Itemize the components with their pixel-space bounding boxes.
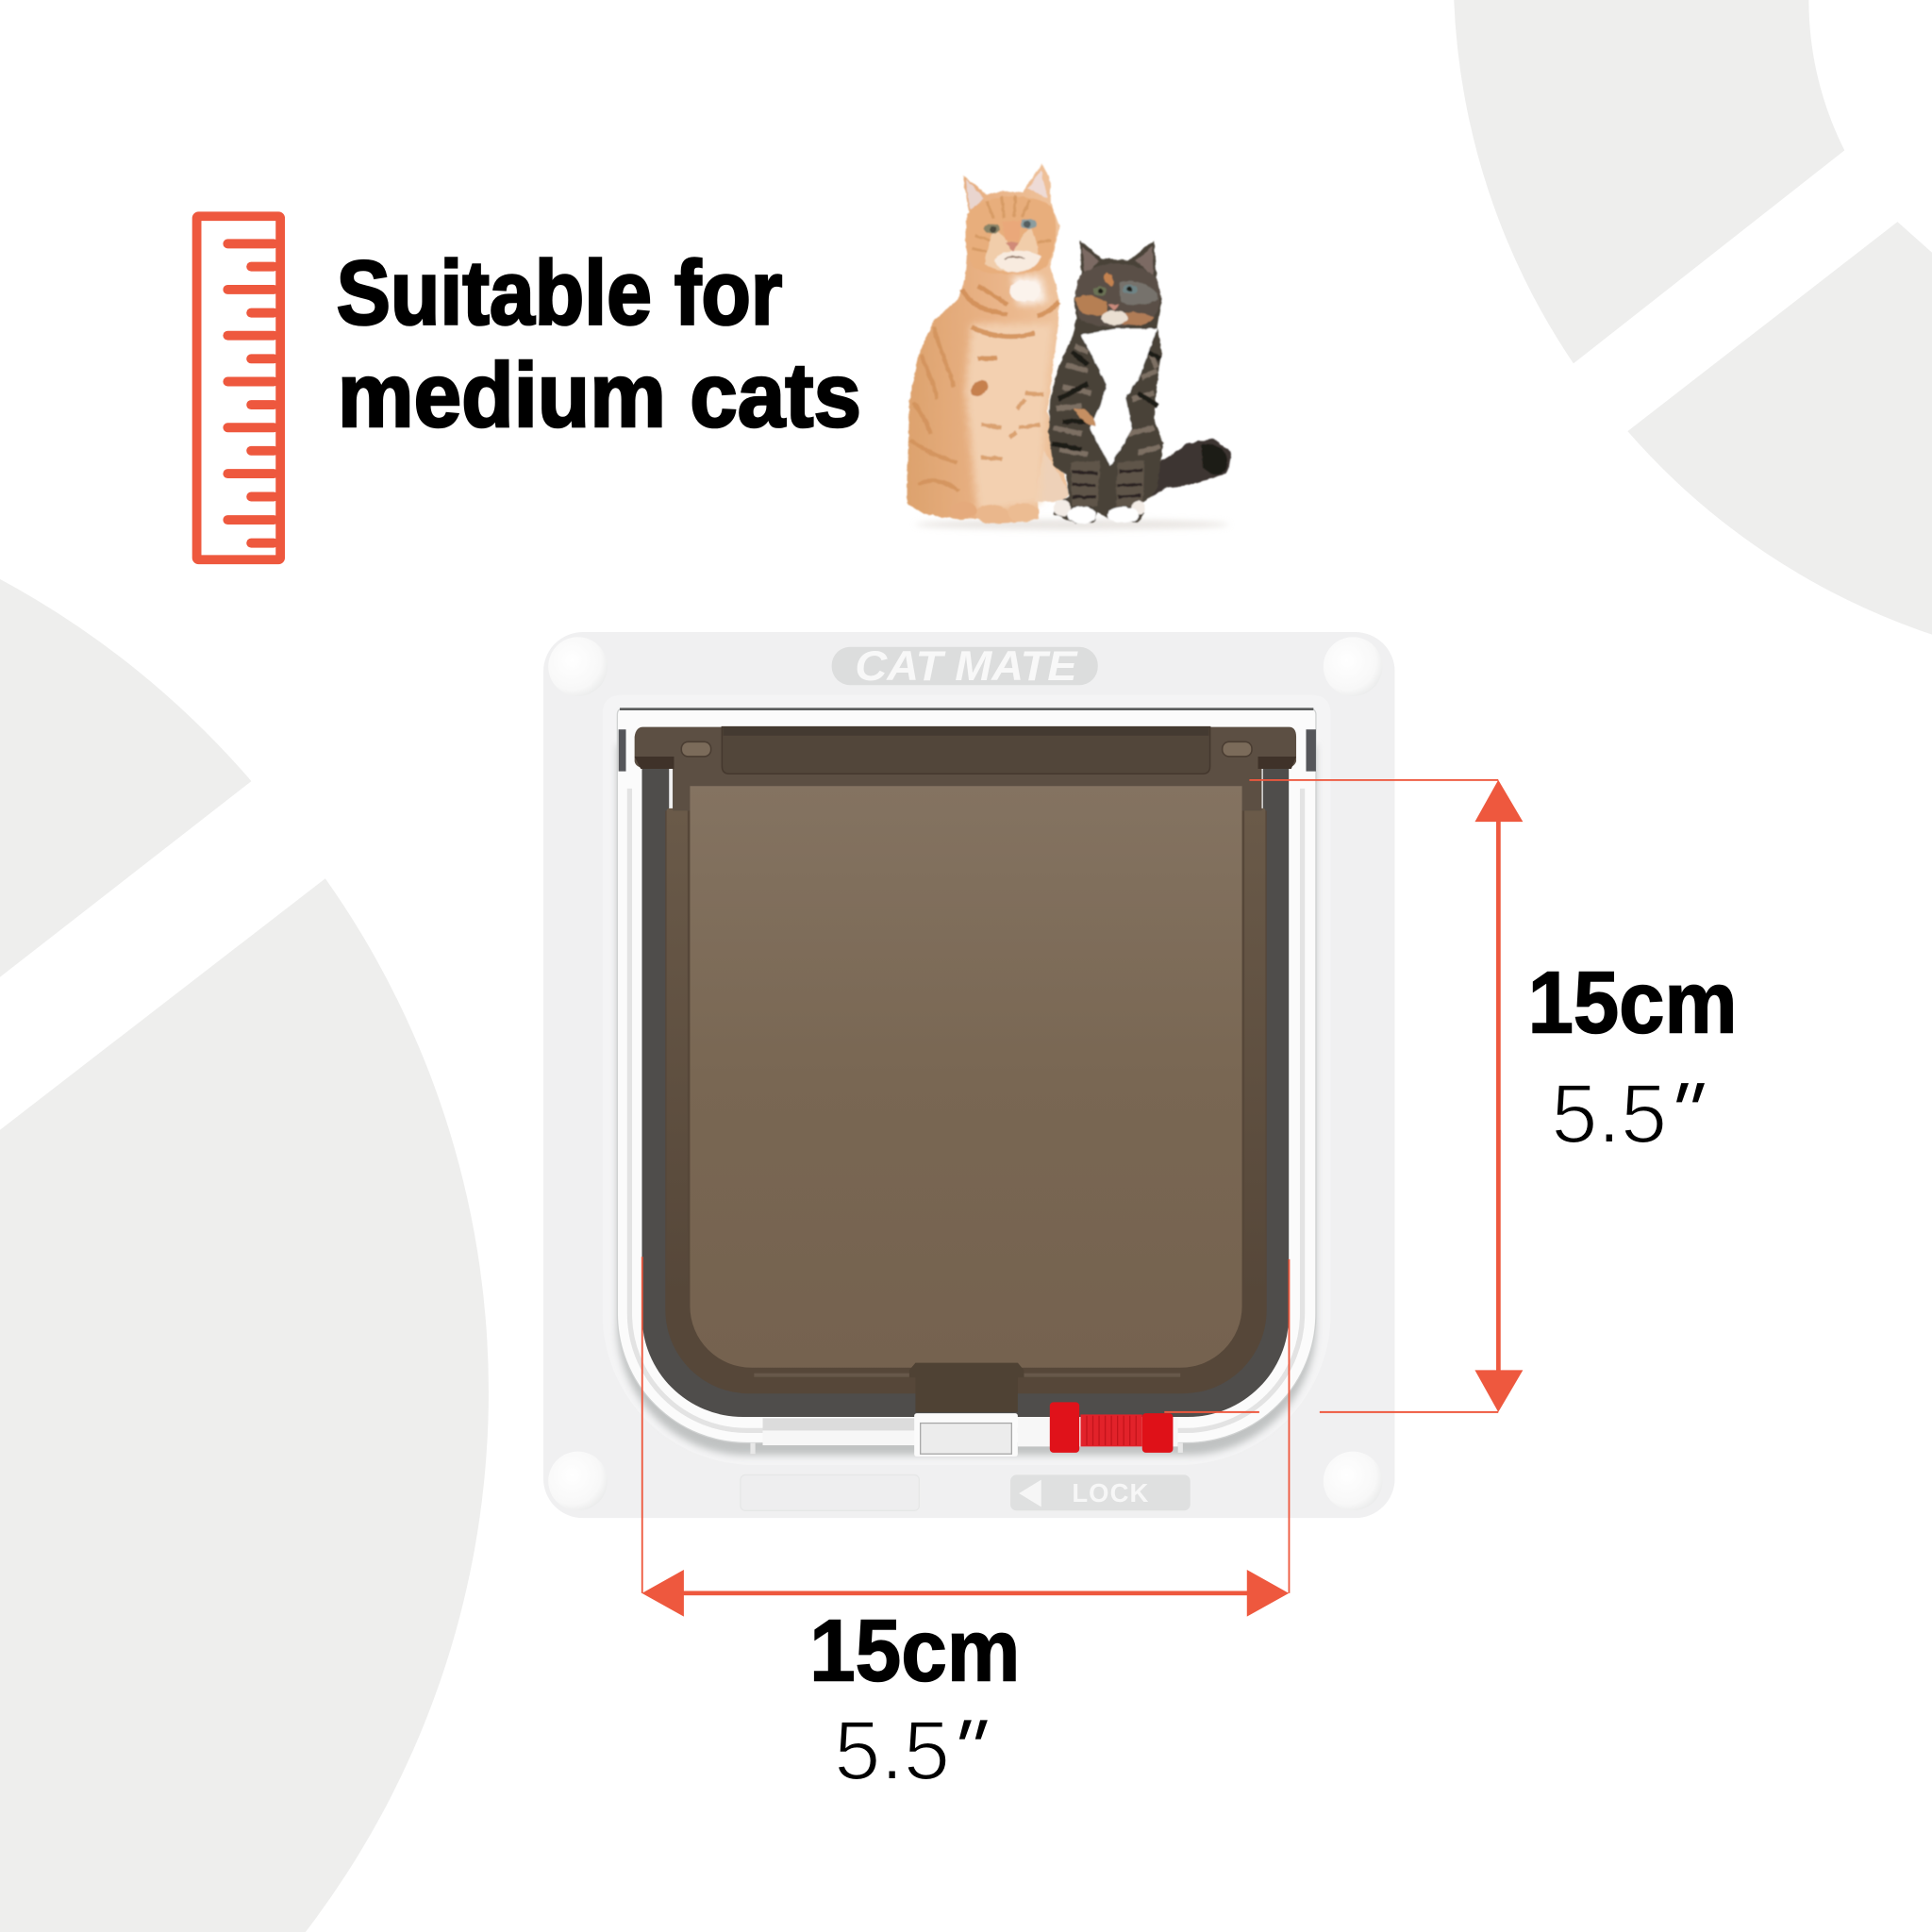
LOCK label: LOCK xyxy=(1072,1478,1149,1507)
icon: ruler xyxy=(197,216,280,559)
label: width: 5.5 xyxy=(834,1704,950,1797)
raised hinge bar xyxy=(722,727,1210,774)
hinge slots xyxy=(681,741,711,757)
image: two cats xyxy=(908,163,1231,529)
label: height: 15cm xyxy=(1528,954,1738,1052)
top bar corners xyxy=(635,757,1296,769)
frame inner shading xyxy=(629,789,1303,1430)
label: height: 5.5 xyxy=(1551,1067,1667,1160)
calico white bib xyxy=(1081,328,1158,465)
title: medium cats xyxy=(338,345,861,446)
frame top line xyxy=(620,708,1313,710)
chest and legs xyxy=(965,324,1054,512)
dark gaps at top corners xyxy=(619,729,1316,772)
product: cat flap door xyxy=(543,632,1395,1518)
corner screw bosses xyxy=(548,637,1382,1510)
horizontal dimension arrow xyxy=(641,1257,1290,1617)
flap frame xyxy=(665,810,1267,1393)
vertical dimension arrow xyxy=(1164,779,1523,1413)
background: bottom left disc segments xyxy=(0,579,489,1932)
recess around frame xyxy=(603,695,1331,1465)
LOCK label xyxy=(1010,1474,1191,1510)
title xyxy=(337,243,861,446)
calico cat xyxy=(1049,241,1231,524)
background: top right ring segments xyxy=(1454,0,1932,635)
label: height xyxy=(1528,954,1738,1160)
title: Suitable for xyxy=(337,243,782,344)
door plate xyxy=(543,632,1395,1518)
bottom rail xyxy=(750,1417,1183,1454)
flap tab xyxy=(909,1363,1024,1412)
bottom ridge xyxy=(754,1374,1180,1376)
orange cat xyxy=(908,163,1070,524)
flap window xyxy=(690,786,1242,1368)
frame shadow xyxy=(617,745,1316,1456)
label: width xyxy=(809,1602,1020,1797)
flap top bar xyxy=(635,727,1296,810)
red lock xyxy=(1050,1402,1173,1453)
white frame xyxy=(617,708,1316,1442)
latch xyxy=(914,1413,1018,1457)
brush seal xyxy=(641,766,1289,1417)
CAT MATE badge: CAT MATE xyxy=(855,643,1078,690)
white gap beside flap xyxy=(669,769,1263,813)
blank label xyxy=(741,1474,919,1510)
label: width: 15cm xyxy=(809,1602,1020,1700)
side bars xyxy=(667,808,1265,1293)
